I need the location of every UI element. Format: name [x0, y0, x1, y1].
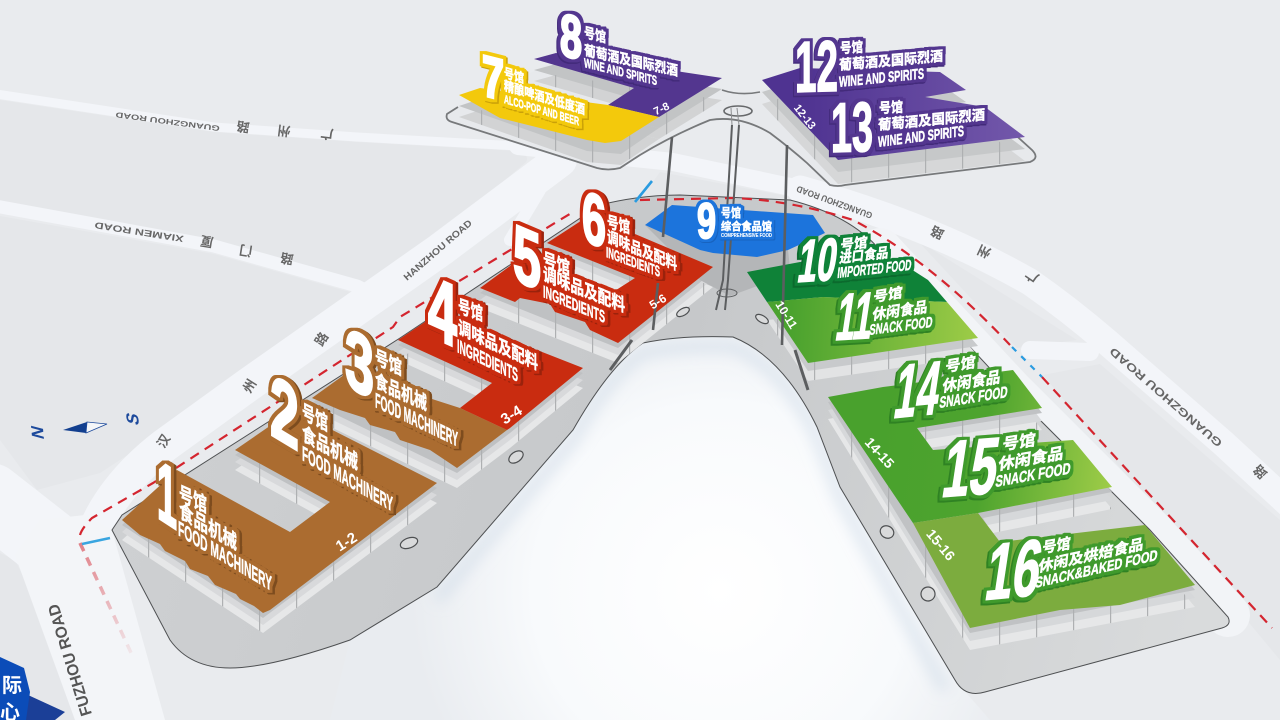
hall 3 top — [312, 372, 507, 468]
label: hall 5: 号馆 — [543, 249, 570, 279]
text: FOOD MACHINERY — [375, 388, 458, 452]
road characters: 路 — [279, 250, 294, 267]
wall: halls 12-13 — [762, 80, 1025, 184]
label: hall 6: 调味品及配料 — [607, 228, 677, 274]
road characters: 路 — [1250, 462, 1270, 481]
road characters: 门 — [238, 242, 253, 259]
Xiamen road label: XIAMEN ROAD — [93, 220, 184, 244]
label: hall 8: 8 — [560, 1, 582, 72]
road characters: 广 — [1022, 266, 1042, 286]
road characters: 汉 — [154, 432, 173, 451]
road characters: 路 — [236, 118, 250, 135]
compass — [27, 410, 143, 441]
label: hall 10: 进口食品 — [839, 244, 889, 266]
hall 11 top — [767, 297, 978, 363]
label: hall 11: 11 — [832, 279, 879, 355]
label: hall 4: 调味品及配料 — [458, 317, 538, 375]
label: hall 11: SNACK FOOD — [869, 314, 933, 339]
label: hall 15: 15 — [937, 421, 1005, 515]
inner curve shadow — [437, 347, 945, 690]
label: hall 14: 休闲食品 — [942, 367, 1001, 396]
label: hall 8: 号馆 — [584, 23, 606, 46]
label: hall 5: 5 — [513, 206, 541, 308]
label: hall 14: 号馆 — [945, 353, 976, 376]
Guangzhou road label top left: GUANGZHOU ROAD — [114, 110, 220, 133]
wall: halls 14-16 — [828, 375, 1195, 650]
label: hall 7 — [482, 44, 585, 128]
label: hall 3: 食品机械 — [375, 369, 427, 415]
label: hall 1: 食品机械 — [179, 498, 237, 555]
wall: hall 7 — [459, 99, 659, 165]
sidewalk along platform — [880, 250, 1228, 615]
road characters: 厦 — [199, 233, 214, 250]
poles and ramps — [610, 108, 808, 390]
platform markers — [399, 305, 938, 604]
label: hall 6: 6 — [582, 175, 606, 264]
text: FOOD MACHINERY — [302, 441, 393, 517]
label: hall 10: 号馆 — [840, 234, 868, 253]
main platform — [112, 195, 1229, 694]
label: hall 15: 号馆 — [1002, 430, 1036, 454]
label: hall 4: 号馆 — [458, 295, 483, 325]
perimeter dashed line — [80, 181, 1272, 657]
label: hall 9: 9 — [697, 193, 716, 249]
connector ring — [724, 106, 752, 116]
label: hall 12: 12 — [795, 27, 838, 108]
label: hall 2 — [270, 355, 393, 517]
blue sign bottom left — [0, 657, 65, 720]
compass: N — [27, 424, 48, 441]
label: hall 11: 休闲食品 — [872, 298, 928, 324]
hall 8 top — [534, 53, 722, 117]
label: hall 4: INGREDIENTS — [457, 336, 518, 387]
label: hall 5: INGREDIENTS — [543, 282, 605, 327]
area numbers: 12-13 — [791, 102, 818, 132]
label: hall 16: SNACK&BAKED FOOD — [1035, 547, 1158, 592]
label: hall 10 — [794, 225, 912, 295]
label: hall 9: COMPREHENSIVE FOOD — [721, 233, 772, 239]
label: hall 8: WINE AND SPIRITS — [584, 55, 657, 88]
hall 7 top — [459, 88, 659, 143]
label: hall 2: 号馆 — [302, 400, 328, 436]
label: hall 13 — [831, 88, 985, 167]
hall 9 top — [645, 205, 825, 257]
label: hall 13: WINE AND SPIRITS — [878, 123, 964, 151]
label: hall 13: 葡萄酒及国际烈酒 — [878, 106, 985, 133]
road characters: 州 — [975, 242, 993, 261]
road characters — [154, 118, 1270, 481]
text: FOOD MACHINERY — [178, 516, 272, 596]
label: hall 5: 调味品及配料 — [543, 264, 625, 316]
roads — [0, 93, 1280, 560]
label: hall 16 — [980, 523, 1158, 618]
label: hall 13: 号馆 — [879, 99, 903, 116]
wall: halls 3-4 — [312, 317, 583, 488]
area numbers: 15-16 — [923, 526, 959, 564]
label: hall 7: 7 — [482, 44, 504, 113]
label: hall 9 — [697, 193, 772, 249]
area numbers: 3-4 — [498, 402, 526, 428]
label: hall 6: 号馆 — [607, 212, 630, 237]
wall: halls 1-2 — [122, 415, 437, 633]
label: hall 9: 号馆 — [721, 205, 741, 220]
label: hall 6: INGREDIENTS — [606, 244, 660, 281]
label: hall 7: ALCO-POP AND BEER — [504, 92, 579, 128]
label: hall 3 — [345, 309, 458, 452]
label: hall 12: 号馆 — [840, 39, 863, 56]
road characters: 州 — [277, 122, 291, 139]
label: hall 8 — [560, 1, 678, 88]
label: hall 3: 3 — [345, 309, 374, 417]
label: hall 1: 号馆 — [179, 483, 207, 517]
label: hall 10: IMPORTED FOOD — [837, 257, 912, 282]
label: hall 16: 16 — [980, 523, 1048, 618]
lower centre glow — [330, 337, 990, 720]
wall: halls 10-11 — [767, 305, 978, 381]
label: hall 9: 综合食品馆 — [721, 219, 772, 233]
hall 4 top — [398, 312, 583, 430]
label: hall 12: 葡萄酒及国际烈酒 — [839, 48, 943, 73]
hall 14-15 top — [828, 370, 1112, 523]
label: hall 14: 14 — [889, 346, 946, 435]
label: hall 15: SNACK FOOD — [995, 460, 1071, 491]
upper platform outline — [447, 40, 1036, 186]
label: hall 11: 号馆 — [873, 284, 903, 305]
label: hall 5 — [513, 206, 625, 327]
wall: halls 5-6 — [480, 220, 713, 363]
road characters: 路 — [928, 223, 946, 242]
label: hall 4 — [428, 255, 538, 387]
road characters: 广 — [320, 125, 334, 142]
Guangzhou road label top right: GUANGZHOU ROAD — [795, 184, 874, 221]
label: hall 1: 1 — [157, 441, 177, 548]
hall 1-2 top — [122, 410, 437, 613]
compass: S — [122, 410, 143, 427]
wall: hall 8 — [534, 64, 722, 139]
area numbers: 7-8 — [652, 100, 671, 118]
label: hall 8: 葡萄酒及国际烈酒 — [584, 43, 678, 80]
area numbers: 14-15 — [862, 434, 898, 471]
label: hall 3: 号馆 — [375, 346, 402, 380]
area numbers: 5-6 — [647, 291, 669, 312]
area numbers — [333, 100, 959, 564]
label: hall 7: 精酿啤酒及低度酒 — [504, 77, 585, 117]
Fuzhou road surface — [15, 515, 165, 720]
label: hall 14: SNACK FOOD — [939, 383, 1008, 412]
label: hall 7: 号馆 — [504, 64, 524, 86]
hall 5-6 top — [480, 215, 713, 343]
blue sign bottom left: 际 — [2, 674, 22, 697]
area numbers: 1-2 — [333, 529, 360, 555]
hall tops — [122, 53, 1195, 628]
label: hall 10: 10 — [794, 225, 842, 295]
road characters: 路 — [312, 330, 331, 349]
label: hall 13: 13 — [831, 88, 873, 167]
hall 10 top — [747, 262, 947, 302]
support under hall 9 — [645, 225, 790, 296]
label: hall 15: 休闲食品 — [998, 443, 1064, 474]
label: hall 1 — [157, 441, 272, 596]
label: hall 4: 4 — [428, 255, 457, 367]
Guangzhou road label right: GUANGZHOU ROAD — [1108, 345, 1225, 449]
label: hall 2: 2 — [270, 355, 299, 471]
label: hall 16: 号馆 — [1042, 534, 1071, 557]
label: hall 12: WINE AND SPIRITS — [839, 66, 924, 91]
Hanzhou road label: HANZHOU ROAD — [402, 218, 475, 283]
hall 16 top — [913, 513, 1195, 628]
hall 12-13 top — [762, 68, 1025, 160]
label: hall 16: 休闲及烘焙食品 — [1038, 535, 1144, 576]
area numbers: 10-11 — [772, 298, 800, 332]
label: hall 2: 食品机械 — [302, 421, 358, 474]
label: hall 6 — [582, 175, 677, 281]
label: hall 12 — [795, 27, 943, 108]
road characters: 州 — [240, 377, 259, 396]
Fuzhou road label: FUZHOU ROAD — [46, 602, 96, 718]
